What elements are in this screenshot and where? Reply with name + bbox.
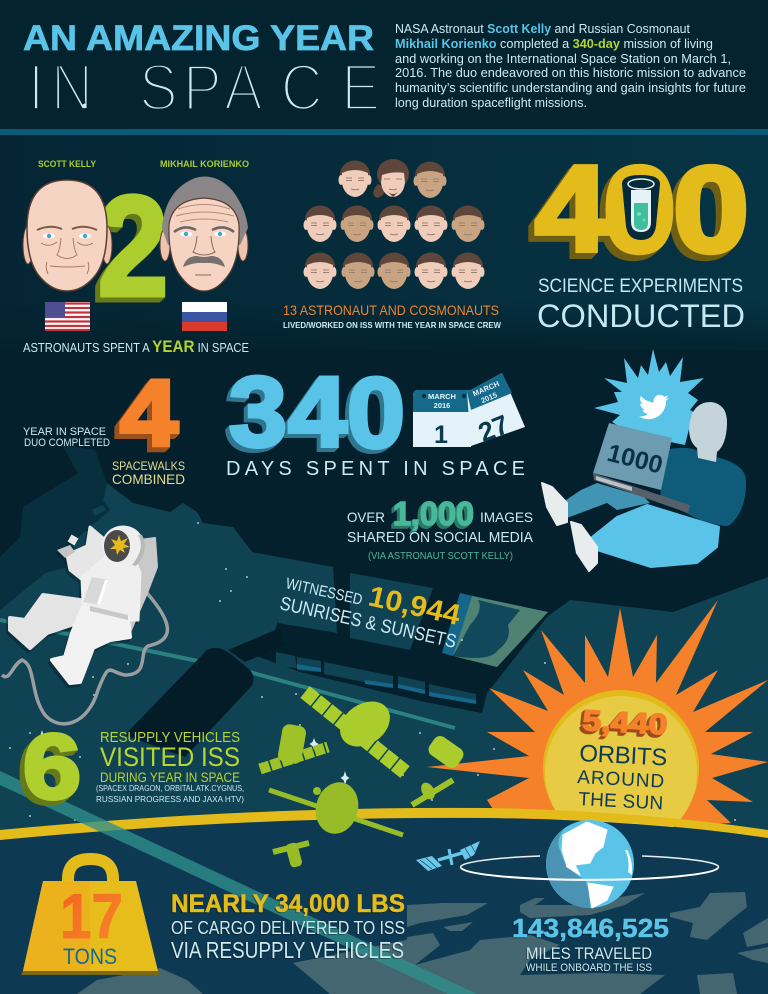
illustration: astronaut with laptop (542, 349, 746, 571)
images line (347, 495, 533, 532)
figure head (689, 402, 727, 462)
orbits number: 5,440 (582, 705, 668, 741)
panel: 400 experiments (535, 140, 749, 334)
number 340: 0 (347, 357, 405, 468)
sunrises stat: 10,944 (365, 581, 463, 632)
figure torso (660, 448, 746, 526)
panel: 340 days (226, 356, 525, 480)
title: IN SPACE (28, 52, 380, 125)
icon: iss (416, 841, 480, 871)
resupply caption: VISITED ISS (100, 742, 240, 772)
portrait: Scott Kelly (23, 180, 112, 291)
miles stat: WHILE ONBOARD THE ISS (526, 962, 652, 974)
experiments caption: CONDUCTED (537, 298, 745, 334)
illustration: spacewalking astronaut (2, 526, 167, 724)
laptop: 1000 (604, 439, 665, 480)
panel: 13 crew faces (283, 159, 502, 330)
cargo stat (171, 890, 405, 963)
number 400: 0 (673, 142, 749, 278)
front leg (592, 505, 719, 567)
icon: twitter bird (639, 395, 669, 419)
number 2: 2 (98, 167, 168, 326)
vehicles note (96, 783, 244, 804)
illustration: sun (427, 600, 768, 848)
intro paragraph: long duration spaceflight missions. (395, 96, 587, 110)
intro paragraph: and working on the International Space Station on March 1, (395, 52, 731, 66)
twitter burst (594, 349, 710, 445)
source note: (VIA ASTRONAUT SCOTT KELLY) (368, 551, 513, 562)
vehicle: capsule (426, 733, 466, 771)
icon: weight with 17 tons (21, 859, 160, 975)
weight number: 17 (60, 882, 123, 952)
yellow horizon band (0, 808, 768, 840)
spacewalks lead-in (23, 426, 110, 449)
number 340 (229, 356, 405, 468)
resupply caption (100, 729, 240, 785)
miles stat (512, 915, 669, 974)
back leg (566, 483, 650, 518)
cargo stat: OF CARGO DELIVERED TO ISS (171, 918, 405, 938)
orbits caption: AROUND (577, 767, 665, 793)
icon: calendar: 1 (434, 421, 448, 449)
station window blocks (276, 652, 476, 704)
icon: calendar: 27 (474, 409, 513, 448)
images line: 1,000 (393, 495, 474, 532)
images line: OVER (347, 509, 385, 525)
images stat (347, 495, 533, 562)
vehicle: progress craft (269, 777, 403, 839)
icon: calendar (413, 373, 525, 449)
vehicle: htv craft (273, 842, 309, 868)
green supply vehicles (260, 692, 466, 868)
cargo stat: NEARLY 34,000 LBS (171, 890, 405, 918)
vehicle: large solar panel craft (305, 692, 405, 772)
station solar panels (252, 552, 548, 667)
portrait: Mikhail Korienko (160, 176, 248, 291)
flag: United States (45, 302, 90, 331)
miles stat: MILES TRAVELED (526, 944, 652, 963)
caption: a year in space: ASTRONAUTS SPENT A YEAR IN SPACE (23, 337, 249, 356)
station silhouette (0, 350, 768, 757)
experiments caption (537, 276, 745, 334)
number 340: 3 (229, 356, 287, 467)
intro paragraph: 2016. The duo endeavored on this historic mission to advance (395, 66, 746, 80)
name: Mikhail Korienko: MIKHAIL KORIENKO (160, 159, 249, 170)
icon: calendar: MARCH (428, 392, 456, 401)
beam across space (0, 620, 455, 728)
experiments caption: SCIENCE EXPERIMENTS (538, 276, 743, 297)
number 400: 0 (603, 142, 676, 278)
intro paragraph: NASA Astronaut Scott Kelly and Russian Cosmonaut (395, 22, 691, 36)
icon: calendar: MARCH (471, 379, 501, 398)
diagonal beam (0, 771, 477, 994)
panel: two astronauts (23, 159, 249, 356)
sunrises stat: WITNESSED (284, 575, 364, 609)
sunrises stat: SUNRISES & SUNSETS (278, 593, 458, 653)
icon: calendar: 2016 (434, 401, 450, 410)
tether (2, 593, 167, 724)
crew face grid (304, 159, 484, 289)
land masses (77, 892, 768, 994)
crew caption: 13 ASTRONAUT AND COSMONAUTS (283, 302, 499, 318)
number 6: 6 (23, 716, 81, 818)
crew sub-caption: LIVED/WORKED ON ISS WITH THE YEAR IN SPACE CREW (283, 320, 502, 330)
intro paragraph: humanity’s scientific understanding and gain insights for future (395, 81, 746, 95)
sunrises stat (278, 575, 463, 653)
number 400: 4 (535, 140, 608, 276)
vehicle: small craft (412, 780, 453, 805)
vehicles note: RUSSIAN PROGRESS AND JAXA HTV) (96, 794, 244, 804)
laptop (593, 423, 690, 513)
orbits caption: ORBITS (579, 740, 668, 772)
title: AN AMAZING YEAR (23, 19, 374, 58)
weight unit: TONS (63, 944, 117, 969)
shoes (542, 483, 597, 571)
spacewalks lead-in: DUO COMPLETED (24, 437, 110, 449)
number 400 (535, 140, 749, 278)
panel: spacewalks (23, 360, 185, 487)
spacewalks caption: SPACEWALKS (112, 461, 185, 473)
suit (10, 526, 157, 683)
resupply caption: DURING YEAR IN SPACE (100, 770, 240, 785)
spacewalks caption (112, 461, 185, 487)
social media line: SHARED ON SOCIAL MEDIA (347, 530, 533, 546)
vehicles note: (SPACEX DRAGON, ORBITAL ATK.CYGNUS, (96, 783, 244, 793)
resupply caption: RESUPPLY VEHICLES (100, 729, 240, 746)
flag: Russia (182, 302, 227, 331)
number 4: 4 (120, 360, 178, 465)
orbits caption (577, 740, 668, 814)
icon: calendar: 2015 (480, 390, 498, 405)
intro paragraph: Mikhail Korienko completed a 340-day mission of living (395, 37, 713, 51)
illustration: earth with orbit (461, 820, 718, 908)
miles stat: 143,846,525 (512, 915, 669, 943)
intro paragraph (395, 22, 746, 110)
number 340: 4 (288, 356, 347, 467)
spacewalks caption: COMBINED (112, 471, 185, 487)
cargo stat: VIA RESUPPLY VEHICLES (171, 937, 404, 963)
stars (9, 522, 736, 830)
earth surface (0, 771, 768, 994)
images line: IMAGES (480, 509, 533, 525)
name: Scott Kelly: SCOTT KELLY (38, 159, 97, 170)
title (23, 19, 380, 125)
orbits caption: THE SUN (578, 789, 664, 814)
icon: test tube (622, 175, 660, 240)
panel: resupply vehicles (23, 716, 244, 818)
spacewalks lead-in: YEAR IN SPACE (23, 426, 106, 438)
vehicle: cygnus craft (260, 723, 328, 769)
days caption: DAYS SPENT IN SPACE (226, 458, 525, 480)
